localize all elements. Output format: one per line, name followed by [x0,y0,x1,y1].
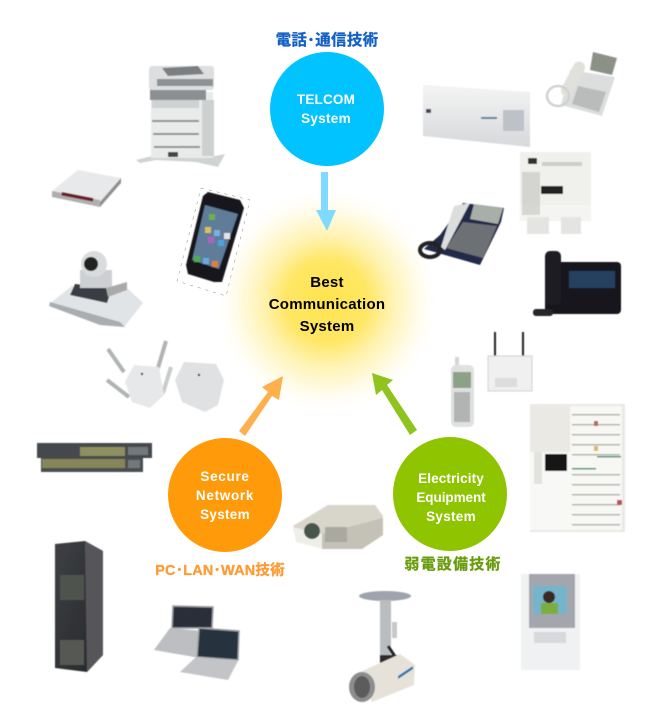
device: broadband router [52,170,121,207]
device: cordless handset [451,357,474,427]
arrow: telcom to centre [316,172,336,231]
node: Secure Network System: Network [196,488,254,503]
device: laptops [154,606,239,680]
centre text: Best Communication System [269,274,385,335]
node: Secure Network System: System [200,507,250,522]
device: ceiling mounted camera [349,591,415,702]
node: TELCOM System [270,52,384,166]
centre text: Best Communication System: Communication [269,296,385,313]
centre text: Best Communication System: System [300,318,354,335]
node: TELCOM System: System [301,111,351,126]
heading: PC LAN WAN technology: PC･LAN･WAN技術 [155,562,285,579]
central yellow glow [212,186,442,416]
device: white PBX cabinet [520,152,591,234]
device: smartphone [177,188,250,296]
node: Secure Network System: Secure [200,469,250,484]
device: black touchscreen phone [533,251,621,316]
device: server rack [55,541,103,672]
node: Electricity Equipment System: System [426,509,476,524]
device: network switch [37,443,152,472]
node: Secure Network System [168,438,282,552]
node: TELCOM System: TELCOM [297,92,355,107]
arrow: network to centre [239,376,283,436]
heading: telecom technology: 電話･通信技術 [276,30,379,49]
device: multifunction printer [136,66,225,167]
device: wireless access points [107,341,224,412]
device: projector [293,505,383,549]
device: wireless base station [488,332,532,391]
node: Electricity Equipment System: Equipment [416,490,486,505]
heading: low-voltage equipment technology: 弱電設備技術 [404,555,502,573]
device: white office phone [547,52,617,116]
arrow: electricity to centre [372,373,417,435]
device: NEC main unit [423,85,530,147]
node: Electricity Equipment System [393,437,507,551]
centre text: Best Communication System: Best [310,274,344,291]
device: navy office phone [420,203,504,265]
device: video door intercom [521,574,580,670]
device: nurse call panel [530,404,625,532]
node: Electricity Equipment System: Electricity [418,471,484,486]
device: video conference camera [49,251,143,327]
